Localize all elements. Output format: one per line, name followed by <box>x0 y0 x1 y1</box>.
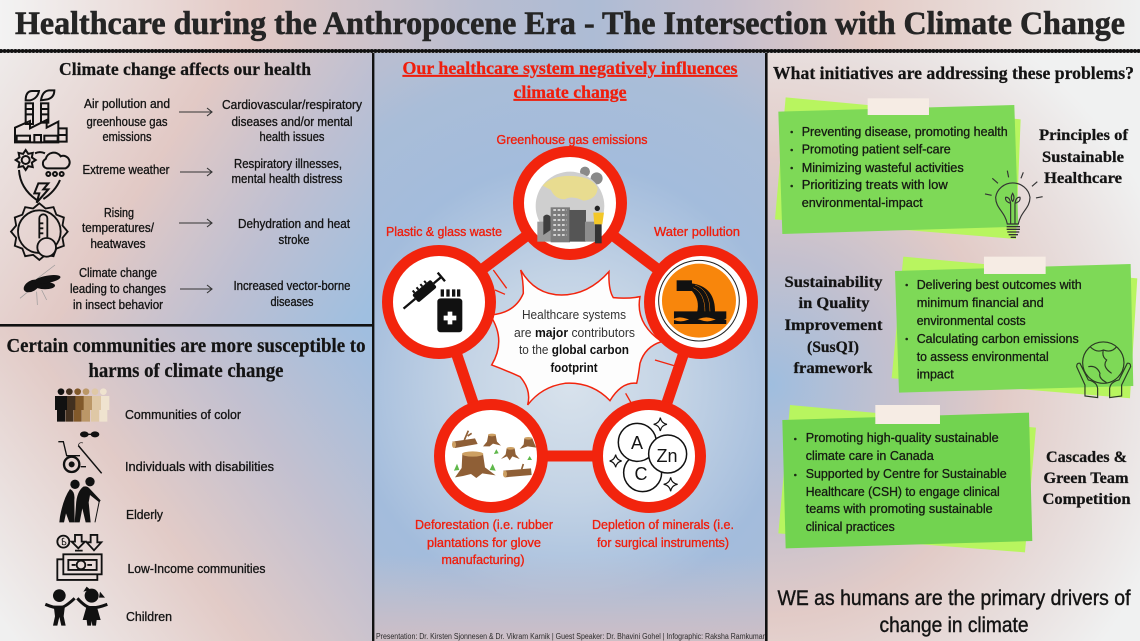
text: burst message: footprint <box>550 360 598 375</box>
text: burst message: Healthcare systems <box>522 307 626 322</box>
icon: mosquito <box>20 265 61 305</box>
label: susqi framework: framework <box>794 360 873 377</box>
note: susqi framework: Calculating carbon emissions <box>917 331 1079 346</box>
header band <box>0 0 1140 50</box>
note: susqi framework <box>892 257 1137 398</box>
label: plastic and glass waste: Plastic & glass waste <box>386 224 502 239</box>
label: principles of sustainable healthcare <box>1039 127 1129 187</box>
note: principles of sustainable healthcare: Prioritizing treats with low <box>802 177 948 192</box>
text: cardiovascular outcomes <box>222 98 363 144</box>
arrow: insects to vector-borne diseases <box>180 285 212 293</box>
panel: susceptible communities background <box>0 326 373 641</box>
heading: certain communities <box>6 335 366 382</box>
note: principles of sustainable healthcare: environmental-impact <box>802 195 923 210</box>
arrow: air pollution to diseases <box>179 108 212 116</box>
label: deforestation <box>415 517 554 567</box>
label: susqi framework: in Quality <box>798 295 870 312</box>
footer credits: Presentation: Dr. Kirsten Sjonnesen & Dr. Vikram Karnik | Guest Speaker: Dr. Bhavini Gohel | Infographic: Raksha Ramkumar <box>376 632 765 641</box>
text: respiratory illnesses: mental health distress <box>232 172 342 186</box>
label: cascades and green team competition: Cascades & <box>1046 449 1127 466</box>
icon: communities of color <box>55 388 109 422</box>
heading: initiatives: What initiatives are addressing these problems? <box>773 63 1134 83</box>
circle: depletion of minerals <box>598 404 700 508</box>
label: water pollution: Water pollution <box>654 224 740 239</box>
text: low-income communities: Low-Income communities <box>128 561 266 576</box>
text: insect behavior: leading to changes <box>70 282 166 296</box>
text: air pollution <box>84 97 170 144</box>
circle: deforestation stumps <box>440 404 542 508</box>
text: element letters: C <box>634 464 648 484</box>
label: cascades and green team competition: Competition <box>1042 491 1131 508</box>
text: dehydration: Dehydration and heat <box>238 217 350 231</box>
text: cardiovascular outcomes: Cardiovascular/respiratory <box>222 98 363 112</box>
text: air pollution: emissions <box>102 130 152 144</box>
label: principles of sustainable healthcare: Principles of <box>1039 127 1129 144</box>
text: insect behavior: Climate change <box>79 266 157 280</box>
text: individuals with disabilities: Individuals with disabilities <box>125 459 274 474</box>
circle: water pollution outflow <box>650 250 752 354</box>
text: dehydration: stroke <box>278 233 310 247</box>
text: vector-borne diseases: diseases <box>270 295 314 309</box>
text: rising temperatures: temperatures/ <box>82 221 154 235</box>
heading: certain communities: Certain communities are more susceptible to <box>6 335 366 357</box>
circle: syringe and medicine bottle <box>388 250 490 354</box>
closing statement: change in climate <box>880 614 1028 637</box>
label: principles of sustainable healthcare: Healthcare <box>1044 170 1122 187</box>
note: principles of sustainable healthcare <box>775 97 1021 239</box>
text: elderly: Elderly <box>126 507 163 522</box>
label: deforestation: plantations for glove <box>427 535 541 550</box>
closing statement <box>778 587 1131 637</box>
note: susqi framework: environmental costs <box>917 313 1026 328</box>
label: cascades and green team competition <box>1042 449 1131 508</box>
text: dehydration <box>238 217 350 247</box>
text: insect behavior <box>70 266 166 312</box>
note: cascades and green team competition: Supported by Centre for Sustainable <box>806 466 1007 481</box>
icon: rising temperature <box>11 203 68 260</box>
text: rising temperatures: Rising <box>104 206 134 220</box>
note: susqi framework: Delivering best outcomes with <box>917 277 1082 292</box>
text: burst message: to the global carbon <box>519 342 629 357</box>
text: air pollution: greenhouse gas <box>86 115 168 129</box>
text: element letters: A <box>631 433 643 453</box>
label: depletion of minerals: for surgical instruments) <box>597 535 729 550</box>
note: cascades and green team competition: teams with promoting sustainable <box>806 501 993 516</box>
note: susqi framework: to assess environmental <box>917 349 1049 364</box>
note: cascades and green team competition <box>778 405 1036 552</box>
heading: climate change affects our health: Climate change affects our health <box>59 59 311 79</box>
label: deforestation: Deforestation (i.e. rubber <box>415 517 554 532</box>
panel: healthcare system background <box>374 53 766 641</box>
heading: certain communities: harms of climate change <box>88 360 284 382</box>
label: susqi framework: Improvement <box>784 317 883 334</box>
note: cascades and green team competition: climate care in Canada <box>806 448 934 463</box>
note: principles of sustainable healthcare: Preventing disease, promoting health <box>802 124 1008 139</box>
label: greenhouse gas emissions: Greenhouse gas emissions <box>496 132 648 147</box>
icon: hands holding globe <box>1077 342 1131 398</box>
label: susqi framework <box>784 274 883 377</box>
note: cascades and green team competition: Promoting high-quality sustainable <box>806 430 999 445</box>
panel: initiatives background <box>767 53 1140 641</box>
icon: money and down arrows <box>57 535 102 580</box>
note: principles of sustainable healthcare: Promoting patient self-care <box>802 142 951 156</box>
text: air pollution: Air pollution and <box>84 97 170 111</box>
circle: greenhouse gas city and globe <box>518 152 622 254</box>
pentagon connectors <box>439 203 701 456</box>
text: cardiovascular outcomes: diseases and/or mental <box>232 115 352 129</box>
icon: elderly couple <box>59 477 101 522</box>
title: Healthcare during the Anthropocene Era - The Intersection with Climate Change <box>15 6 1125 42</box>
arrow: temperatures to dehydration <box>179 219 212 227</box>
icon: lightbulb <box>985 171 1043 237</box>
label: depletion of minerals <box>592 517 734 550</box>
heading: healthcare negatively influences climate: Our healthcare system negatively influences <box>402 58 738 78</box>
label: susqi framework: Sustainability <box>784 274 883 291</box>
panel: climate change affects our health background <box>0 53 373 325</box>
text: children: Children <box>126 609 172 624</box>
icon: factory <box>15 90 67 142</box>
note: cascades and green team competition: clinical practices <box>806 519 895 534</box>
label: deforestation: manufacturing) <box>442 552 524 567</box>
burst: central message <box>478 270 674 405</box>
note: susqi framework: impact <box>917 366 954 382</box>
icon: extreme weather <box>16 150 70 203</box>
text: cardiovascular outcomes: health issues <box>260 130 324 144</box>
text: burst message <box>514 307 635 375</box>
text: element letters <box>631 433 678 484</box>
heading: healthcare negatively influences climate: climate change <box>514 82 627 102</box>
label: depletion of minerals: Depletion of minerals (i.e. <box>592 517 734 532</box>
label: susqi framework: (SusQI) <box>807 339 859 356</box>
text: rising temperatures <box>82 206 154 251</box>
text: element letters: Zn <box>656 446 678 466</box>
text: vector-borne diseases: Increased vector-borne <box>234 279 351 293</box>
text: respiratory illnesses <box>232 157 342 186</box>
icon: children <box>45 587 107 626</box>
note: cascades and green team competition: Healthcare (CSH) to engage clinical <box>806 484 1000 499</box>
text: insect behavior: in insect behavior <box>73 298 163 312</box>
text: rising temperatures: heatwaves <box>90 237 146 251</box>
heading: healthcare negatively influences climate <box>402 58 738 102</box>
text: burst message: are major contributors <box>514 325 635 340</box>
text: vector-borne diseases <box>234 279 351 309</box>
arrow: extreme weather to illnesses <box>180 168 212 176</box>
note: susqi framework: minimum financial and <box>917 295 1044 310</box>
text: respiratory illnesses: Respiratory illnesses, <box>234 157 342 171</box>
note: principles of sustainable healthcare: Minimizing wasteful activities <box>802 160 964 175</box>
icon: disabilities <box>58 431 102 473</box>
text: extreme weather: Extreme weather <box>82 163 170 177</box>
text: communities of color: Communities of color <box>125 407 242 422</box>
label: cascades and green team competition: Green Team <box>1044 470 1129 487</box>
label: principles of sustainable healthcare: Sustainable <box>1042 149 1124 166</box>
